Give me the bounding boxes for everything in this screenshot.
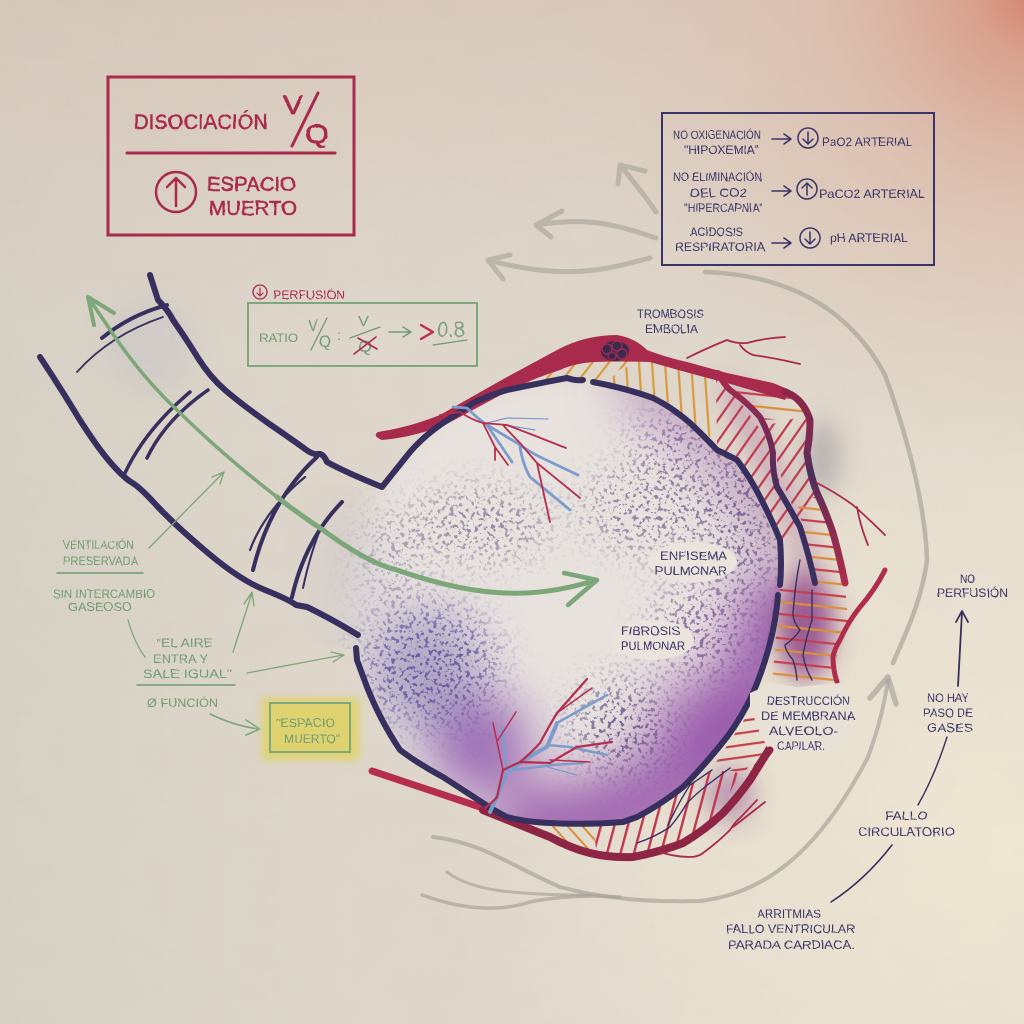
alveolus outline	[356, 378, 781, 824]
label: trombosis embolia: EMBOLIA	[645, 322, 698, 336]
subtitle: espacio muerto	[207, 174, 297, 220]
text: ventilación preservada: VENTILACIÓN	[63, 537, 134, 552]
rings	[77, 305, 342, 597]
capillary veins	[637, 560, 812, 843]
label: destrucción membrana: DESTRUCCIÓN	[767, 693, 850, 708]
lower artery joining patch	[757, 750, 770, 767]
label: destrucción membrana: DE MEMBRANA	[761, 709, 855, 723]
smudges	[105, 295, 840, 823]
row: hipoxemia: PaO2 ARTERIAL	[822, 135, 912, 149]
text: el aire entra y sale igual: "EL AIRE	[156, 636, 213, 650]
callout: espacio muerto: "ESPACIO	[276, 716, 335, 730]
label: enfisema pulmonar: PULMONAR	[655, 564, 727, 578]
arrow: to no perfusión	[956, 611, 968, 686]
green airflow arrow	[88, 297, 597, 605]
text: el aire entra y sale igual: Ø FUNCIÓN	[147, 695, 218, 710]
text: el aire entra y sale igual: SALE IGUAL"	[143, 667, 232, 681]
panel: perfusion ratio: Q	[319, 332, 331, 351]
connector: fallo to gases	[918, 737, 947, 805]
row: hipoxemia: "HIPOXEMIA"	[684, 143, 759, 157]
panel: perfusion ratio: 0.8	[437, 317, 465, 342]
ratio V/Q: Q	[305, 119, 329, 149]
label: arritmias: ARRITMIAS	[757, 907, 821, 921]
text: ventilación preservada: PRESERVADA	[63, 554, 138, 568]
perfusion label: PERFUSIÓN	[273, 287, 345, 302]
label: fallo circulatorio	[858, 809, 955, 839]
panel: perfusion ratio	[248, 285, 477, 366]
title panel: disociación V/Q	[108, 77, 354, 235]
label: fallo circulatorio: FALLO	[885, 809, 928, 823]
text: el aire entra y sale igual	[137, 636, 235, 710]
artery with hump	[376, 335, 790, 440]
text: ventilación preservada	[53, 537, 155, 614]
label: arritmias	[726, 907, 855, 952]
gray circulation loop	[422, 272, 927, 908]
label: enfisema pulmonar: ENFISEMA	[660, 549, 727, 563]
label: no perfusión: PERFUSIÓN	[937, 585, 1008, 600]
row: hipoxemia: NO OXIGENACIÓN	[673, 127, 761, 142]
thrombus clot	[601, 341, 629, 361]
text: ventilación preservada: GASEOSO	[68, 600, 132, 614]
lower capillary bed	[485, 679, 612, 812]
panel: perfusion ratio: Q	[358, 337, 372, 356]
label: destrucción membrana: CAPILAR.	[777, 739, 825, 753]
row: acidosis	[675, 225, 908, 254]
label: fibrosis pulmonar: FIBROSIS	[621, 624, 680, 638]
label: fibrosis pulmonar: PULMONAR	[621, 639, 685, 653]
label: fibrosis pulmonar	[621, 624, 685, 653]
label: arritmias: FALLO VENTRICULAR	[726, 922, 855, 936]
label: no perfusión	[937, 572, 1008, 600]
label: fallo circulatorio: CIRCULATORIO	[858, 825, 955, 839]
upper capillary bed	[440, 407, 580, 522]
panel: consequences table	[662, 113, 934, 265]
row: hipercapnia: NO ELIMINACIÓN	[673, 169, 762, 184]
panel: perfusion ratio: V	[308, 316, 319, 335]
label: no hay paso de gases: NO HAY	[927, 691, 969, 705]
row: hipercapnia: "HIPERCAPNIA"	[684, 201, 763, 215]
label: no hay paso de gases: GASES	[927, 721, 973, 735]
green callout arrows	[128, 472, 344, 735]
panel: perfusion ratio: RATIO	[259, 331, 298, 345]
air tube with cartilage rings	[40, 275, 440, 635]
label: destrucción membrana	[761, 693, 855, 753]
icon: up arrow circle	[156, 172, 196, 212]
callout: espacio muerto	[262, 698, 359, 760]
gray fan arrows from table	[488, 165, 656, 279]
label: no perfusión: NO	[960, 572, 975, 586]
label: trombosis embolia	[637, 307, 704, 336]
row: hipoxemia	[673, 127, 912, 157]
subtitle: espacio muerto: ESPACIO	[207, 174, 296, 196]
panel: perfusion ratio: V	[358, 313, 369, 330]
title heading: DISOCIACIÓN	[134, 111, 268, 134]
lung speckle texture	[360, 415, 775, 770]
connector: arritmias to fallo	[831, 845, 892, 902]
row: hipercapnia: PaCO2 ARTERIAL	[819, 187, 925, 201]
row: hipercapnia	[673, 169, 925, 215]
callout: espacio muerto: MUERTO"	[284, 732, 340, 746]
subtitle: espacio muerto: MUERTO	[209, 198, 297, 220]
label: no hay paso de gases	[923, 691, 973, 735]
torn label patches	[610, 542, 857, 753]
text: el aire entra y sale igual: ENTRA Y	[153, 652, 208, 666]
perfusion label	[253, 285, 345, 302]
label: arritmias: PARADA CARDIACA.	[728, 938, 855, 952]
text: ventilación preservada: SIN INTERCAMBIO	[53, 587, 155, 601]
alveolar wall hatching	[515, 358, 848, 857]
ratio V/Q: V	[283, 90, 304, 120]
ratio V/Q	[283, 90, 329, 149]
lung parenchyma wash	[320, 380, 785, 830]
row: acidosis: pH ARTERIAL	[830, 231, 908, 245]
pulmonary vessels	[372, 335, 885, 857]
label: destrucción membrana: ALVEOLO-	[769, 724, 838, 738]
label: trombosis embolia: TROMBOSIS	[637, 307, 704, 321]
distal arterioles	[660, 337, 885, 857]
label: enfisema pulmonar	[655, 549, 727, 578]
row: hipercapnia: DEL CO2	[690, 186, 747, 200]
row: acidosis: RESPIRATORIA	[675, 240, 765, 254]
panel: perfusion ratio: :	[337, 327, 341, 343]
label: no hay paso de gases: PASO DE	[923, 706, 973, 720]
purple fibrosis shading	[320, 385, 785, 828]
row: acidosis: ACIDOSIS	[690, 225, 743, 239]
